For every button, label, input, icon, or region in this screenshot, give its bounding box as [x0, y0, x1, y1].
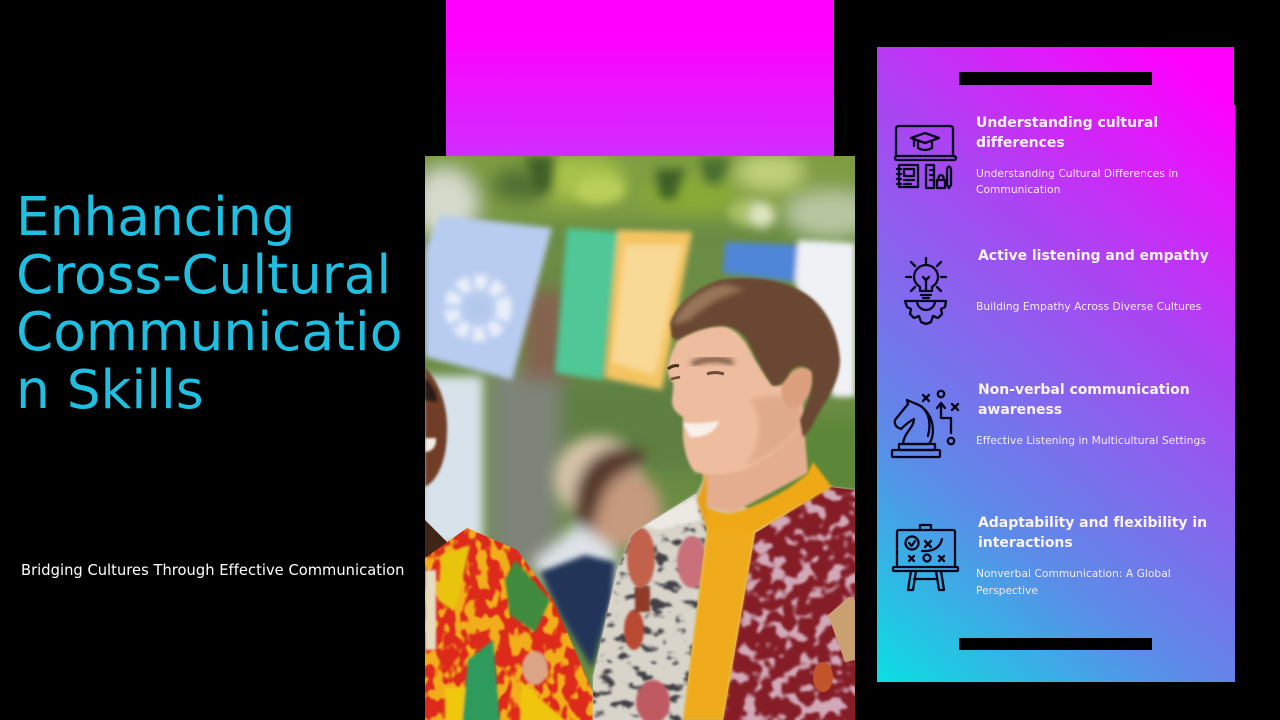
heading: adaptability and flexibility — [978, 515, 1207, 551]
title: Enhancing — [16, 186, 295, 248]
magenta backing rectangle — [446, 0, 834, 156]
icon: laptop with graduation cap and study tools — [894, 124, 958, 190]
subtitle: Bridging Cultures Through Effective Communication — [21, 562, 404, 579]
heading: non-verbal communication awareness: awareness — [978, 402, 1062, 418]
heading: active listening and empathy: Active listening and empathy — [978, 248, 1209, 264]
heading: understanding cultural differences: Understanding cultural — [976, 115, 1158, 131]
neck — [698, 412, 808, 513]
woman at left — [420, 368, 600, 720]
text: understanding cultural differences: Communication — [976, 183, 1060, 196]
heading: non-verbal communication awareness — [978, 382, 1190, 418]
face — [668, 326, 805, 474]
icon: presentation board with game plan — [892, 524, 960, 592]
blurred person in background — [530, 436, 662, 668]
bottom black bar — [959, 638, 1152, 650]
text: nonverbal communication: Perspective — [976, 584, 1038, 597]
title: Communicatio — [16, 301, 402, 363]
heading: adaptability and flexibility: interactions — [978, 535, 1073, 551]
heading: understanding cultural differences: differences — [976, 135, 1065, 151]
icon: light bulb above gear — [904, 256, 948, 326]
photo: students in colourful shirts under bunting — [425, 156, 855, 720]
title: Cross-Cultural — [16, 244, 391, 306]
ear — [781, 367, 813, 408]
yellow placket and collar — [683, 462, 832, 720]
hair — [670, 278, 840, 437]
text: understanding cultural differences — [976, 167, 1178, 196]
shirt base — [593, 473, 855, 720]
cheek shading — [745, 396, 803, 467]
brows and eyes — [692, 359, 733, 364]
text: understanding cultural differences: Understanding Cultural Differences in — [976, 167, 1178, 180]
icon: chess knight with strategy arrows — [890, 390, 960, 458]
white gear motif on the blue flag — [452, 282, 504, 334]
blurred background — [413, 146, 875, 720]
bunting flags — [425, 215, 855, 397]
panel: key topics gradient card — [877, 47, 1235, 682]
smile — [683, 421, 719, 437]
title — [16, 186, 402, 421]
text: effective listening: Effective Listening in Multicultural Settings — [976, 434, 1206, 447]
text: building empathy: Building Empathy Across Diverse Cultures — [976, 300, 1201, 313]
text: nonverbal communication — [976, 567, 1171, 597]
top black bar — [959, 72, 1152, 85]
heading: non-verbal communication awareness: Non-verbal communication — [978, 382, 1190, 398]
heading: understanding cultural differences — [976, 115, 1158, 151]
young man: shirt, collar, head — [590, 278, 860, 720]
title: n Skills — [16, 359, 204, 421]
text: nonverbal communication: Nonverbal Communication: A Global — [976, 567, 1171, 580]
heading: adaptability and flexibility: Adaptability and flexibility in — [978, 515, 1207, 531]
